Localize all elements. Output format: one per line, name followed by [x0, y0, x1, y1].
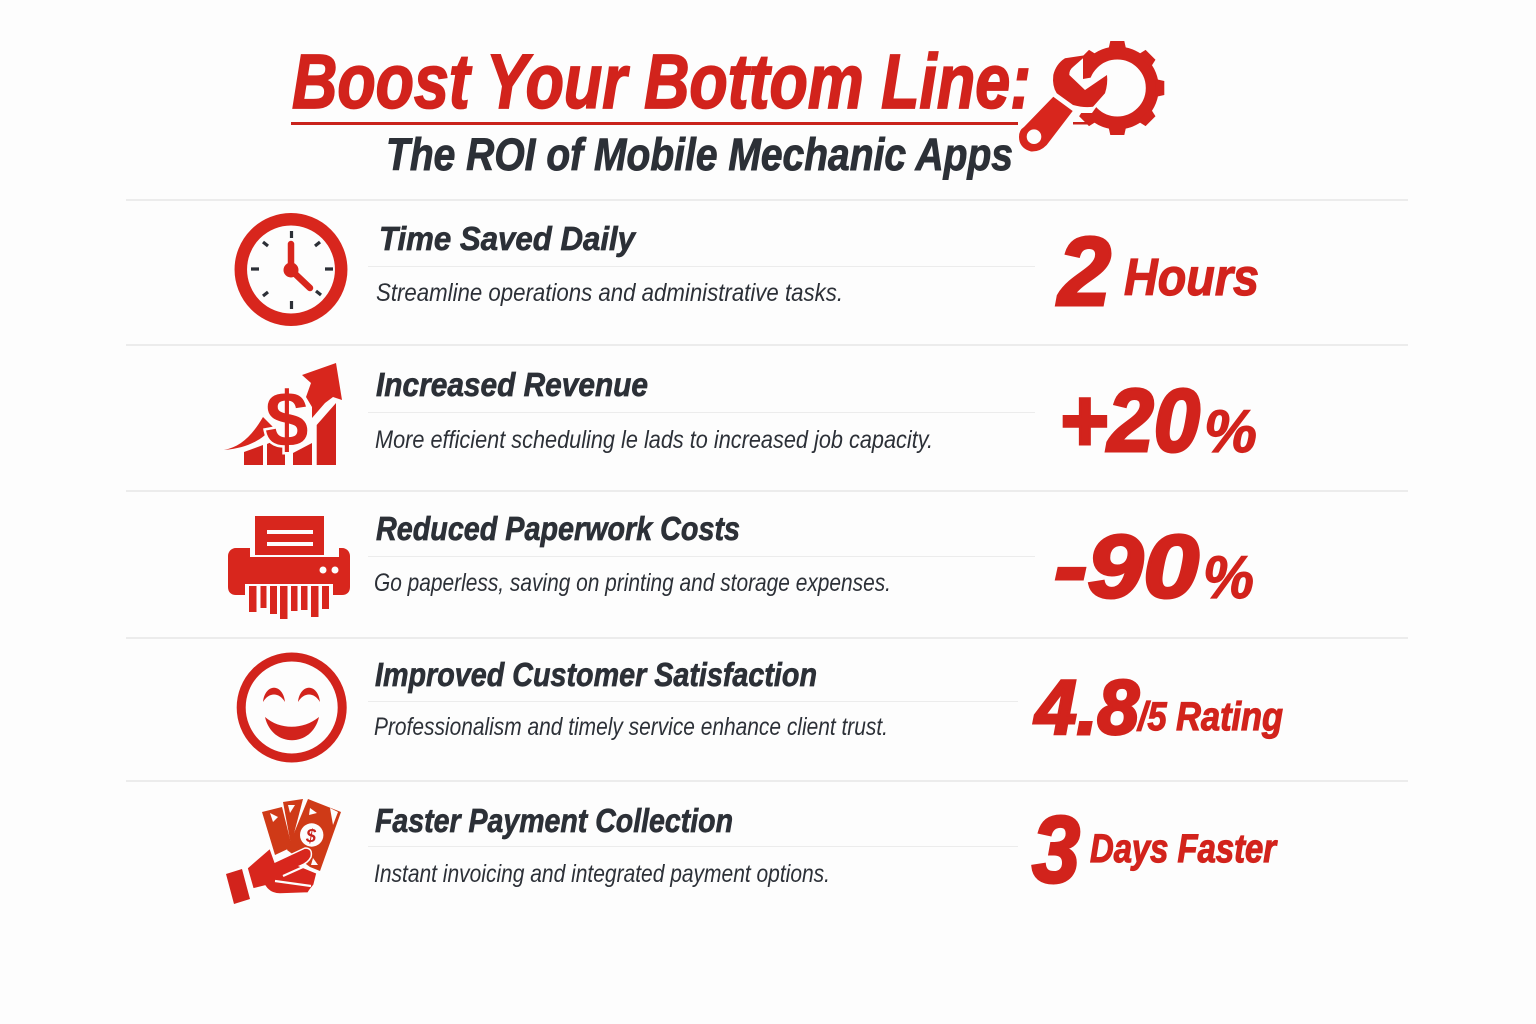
value: 2: [1056, 217, 1111, 326]
icon: clock: [241, 219, 341, 320]
description: More efficient scheduling le lads to increased job capacity.: [375, 426, 933, 454]
icon: hand holding cash: $: [305, 826, 317, 846]
value: [1033, 665, 1283, 751]
icon: smiley face: [241, 657, 342, 758]
icon: revenue growth: $: [265, 375, 308, 463]
heading: Time Saved Daily: [379, 220, 637, 257]
value: Hours: [1124, 249, 1259, 307]
row 2: increased revenue: [224, 363, 1257, 470]
row 4: improved customer satisfaction: [241, 656, 1283, 758]
description: Professionalism and timely service enhance client trust.: [374, 713, 888, 741]
value: %: [1204, 398, 1257, 465]
value: Days Faster: [1090, 827, 1278, 871]
heading: Faster Payment Collection: [375, 802, 733, 839]
row 5: faster payment collection: [226, 797, 1278, 904]
icon: paper shredder: [228, 516, 350, 619]
description: Streamline operations and administrative tasks.: [376, 279, 843, 307]
title: The ROI of Mobile Mechanic Apps: [386, 129, 1013, 180]
value: [1032, 797, 1278, 903]
value: 3: [1032, 797, 1080, 903]
value: +20: [1059, 370, 1200, 470]
title: Boost Your Bottom Line:: [292, 39, 1031, 125]
value: 4.8: [1033, 665, 1139, 751]
value: -90: [1054, 516, 1199, 616]
icon: hand holding cash: [226, 799, 341, 904]
value: [1056, 217, 1259, 326]
value: /5 Rating: [1136, 695, 1283, 739]
description: Instant invoicing and integrated payment options.: [374, 860, 830, 888]
icon: wrench and gear: [1019, 41, 1164, 152]
row 3: reduced paperwork costs: [228, 510, 1254, 619]
description: Go paperless, saving on printing and storage expenses.: [374, 569, 891, 597]
heading: Improved Customer Satisfaction: [375, 656, 817, 693]
title: [291, 39, 1031, 180]
row 1: time saved daily: [241, 217, 1259, 326]
value: [1054, 516, 1254, 616]
value: %: [1203, 544, 1254, 611]
icon: revenue growth: [224, 363, 342, 465]
heading: Increased Revenue: [376, 366, 648, 403]
heading: Reduced Paperwork Costs: [376, 510, 740, 547]
